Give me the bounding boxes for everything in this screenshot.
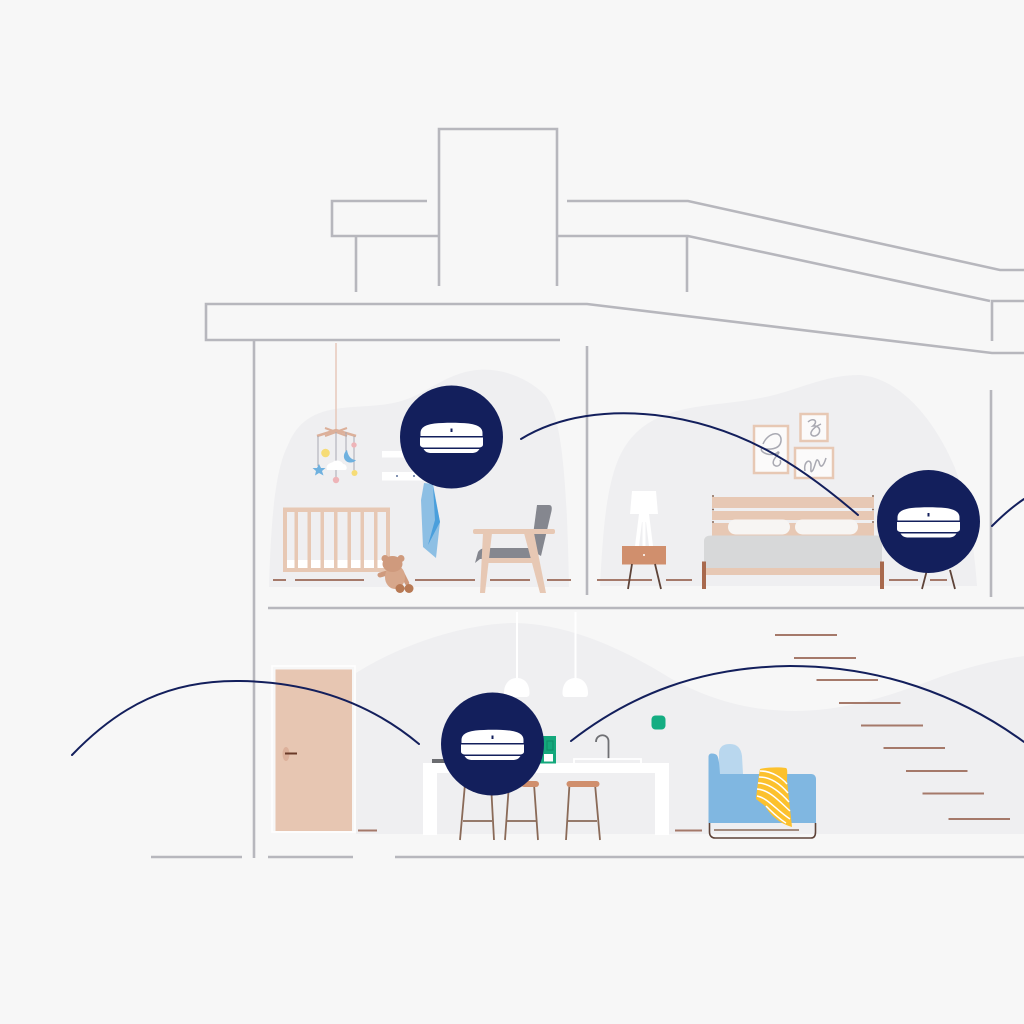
- blue blanket: [421, 483, 440, 558]
- yellow throw: [756, 767, 792, 827]
- bed headboard: [712, 495, 874, 536]
- baby mobile: [312, 428, 358, 483]
- green wall sensor: [652, 716, 666, 730]
- blob: nursery wall: [269, 370, 569, 587]
- arc: nursery to bedroom: [521, 413, 858, 515]
- pendant lamps: [504, 612, 588, 697]
- nightstand: [622, 546, 666, 589]
- nursery furniture: [273, 343, 571, 593]
- mobile hanging cord: [335, 343, 337, 430]
- floor lines: [597, 579, 947, 581]
- teddy bear: [380, 555, 414, 593]
- arc: kitchen to right edge: [571, 666, 1024, 742]
- laptop on counter: [432, 759, 448, 763]
- stools in front of bedroom pod: [922, 570, 955, 589]
- crib: [283, 508, 390, 572]
- pod: nursery: [400, 386, 503, 488]
- green coffee machine: [538, 736, 556, 764]
- art squiggles: [761, 420, 826, 472]
- sink and faucet: [574, 735, 641, 763]
- stair treads: [775, 635, 1010, 819]
- pod: bedroom: [877, 470, 980, 573]
- floor lines: [273, 579, 571, 581]
- door: [272, 666, 355, 832]
- pillows: [728, 520, 790, 534]
- arc: outside to kitchen: [72, 681, 419, 755]
- table lamp: [630, 491, 658, 546]
- pod: kitchen: [441, 692, 544, 796]
- kitchen island: [423, 763, 669, 835]
- house outline: [151, 129, 1024, 858]
- signal arcs: [72, 413, 1024, 755]
- sofa: [708, 744, 816, 838]
- blob: downstairs wall: [356, 623, 1024, 834]
- bedroom furniture: [597, 414, 947, 589]
- stool seats: [521, 781, 600, 787]
- blob: bedroom wall: [600, 375, 977, 586]
- floor lines: [358, 830, 702, 832]
- bed frame: [702, 562, 884, 589]
- wall art frames: [754, 414, 833, 478]
- downstairs furniture: [272, 612, 1010, 840]
- armchair: [473, 505, 555, 593]
- arc: bedroom to right edge: [992, 499, 1024, 526]
- mattress: [704, 536, 882, 568]
- bar stools: [460, 784, 600, 840]
- wall shelves: [382, 451, 424, 480]
